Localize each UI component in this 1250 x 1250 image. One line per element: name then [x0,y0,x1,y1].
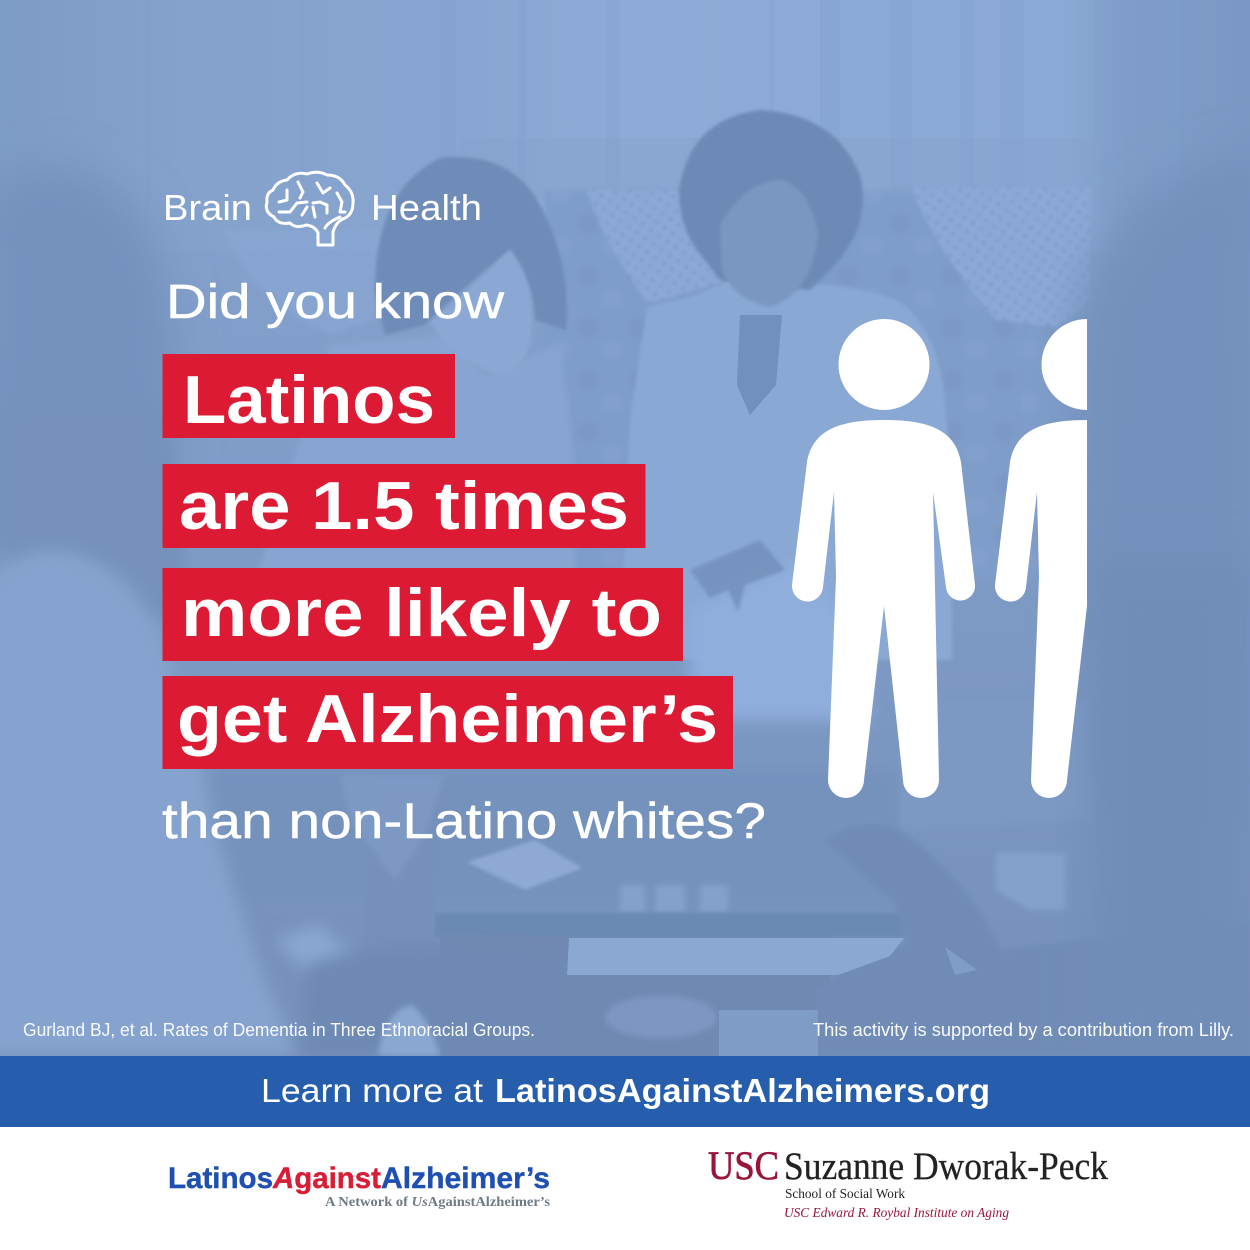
doily far left [225,230,380,335]
woman right: hair [679,110,863,290]
light box at bottom [719,1010,818,1056]
woman right: jacket [620,280,952,660]
light patch near citation [378,1005,440,1056]
footnote: sponsor: This activity is supported by a contribution from Lilly. [813,1020,1234,1040]
banner: learn more: Learn more at [261,1072,483,1109]
label: Brain: Brain [163,187,252,228]
callout: more likely to: more likely to [181,575,662,651]
banner: learn more: LatinosAgainstAlzheimers.org [495,1072,990,1109]
doily left [586,190,722,303]
icon: half person [994,319,1087,798]
logo: Latinos Against Alzheimer's: Alzheimer’s [381,1162,550,1195]
woman left: body [262,356,569,568]
table legs column [362,780,450,945]
bottom-left dark hand [306,952,440,1004]
logo: USC Suzanne Dworak-Peck: USC [708,1143,779,1188]
glasses on table [620,853,1066,912]
text: than non-Latino whites?: than non-Latino whites? [162,793,766,849]
logo: USC Suzanne Dworak-Peck: Suzanne Dworak-Peck [784,1145,1108,1188]
logo: USC Suzanne Dworak-Peck [708,1143,1108,1221]
icon: full person [792,319,975,798]
logo: Latinos Against Alzheimer's: Against [272,1162,381,1195]
logo: USC Suzanne Dworak-Peck: School of Social Work [785,1187,905,1202]
heading: Brain Health with brain icon [163,172,482,245]
banner: learn more [0,1056,1250,1127]
woman left: hair [375,157,567,335]
table: white paper [567,938,904,975]
right side darkening [1113,808,1227,930]
logo: Latinos Against Alzheimer's: A Network of UsAgainstAlzheimer’s [325,1195,551,1210]
icon: brain [266,172,353,245]
logo: Latinos Against Alzheimer's: Latinos [168,1162,273,1195]
sofa [546,192,942,250]
dark left column behind shoulder [136,549,175,608]
right foreground head [1070,189,1250,554]
woman right: hand [690,540,785,612]
logo: USC Suzanne Dworak-Peck: USC Edward R. Roybal Institute on Aging [784,1206,1009,1221]
sliver of light at table edge [945,947,977,975]
woman left: face [430,250,532,374]
forearm highlight [281,926,344,968]
lower-right mesh panel [900,700,1090,830]
woman right: lap [687,657,832,724]
woman right: dark neckline [737,315,782,415]
footnote: citation: Gurland BJ, et al. Rates of Dementia in Three Ethnoracial Groups. [23,1020,535,1040]
logo: Latinos Against Alzheimer's [168,1162,551,1210]
footer panel [0,1127,1250,1250]
callout: more likely to [162,568,683,661]
table top band [435,913,905,937]
callout: are 1.5 times: are 1.5 times [179,468,629,544]
doily right [911,187,1090,327]
icon: two people [792,319,1087,798]
callout: Latinos: Latinos [183,362,435,438]
left foreground shoulder [0,550,300,1056]
text: Did you know: Did you know [166,276,504,329]
bottom dark block under table [452,938,828,1014]
centre floor and seating [190,770,900,900]
napkin [467,840,582,890]
skirt folds [368,782,436,870]
left foreground head [0,180,168,400]
woman right: face [720,180,818,307]
bottom-right dark figure [880,832,984,930]
curtains [0,0,1250,140]
label: Health: Health [371,187,482,228]
bowl on table [605,996,717,1038]
callout: get Alzheimer's: get Alzheimer’s [177,681,718,757]
